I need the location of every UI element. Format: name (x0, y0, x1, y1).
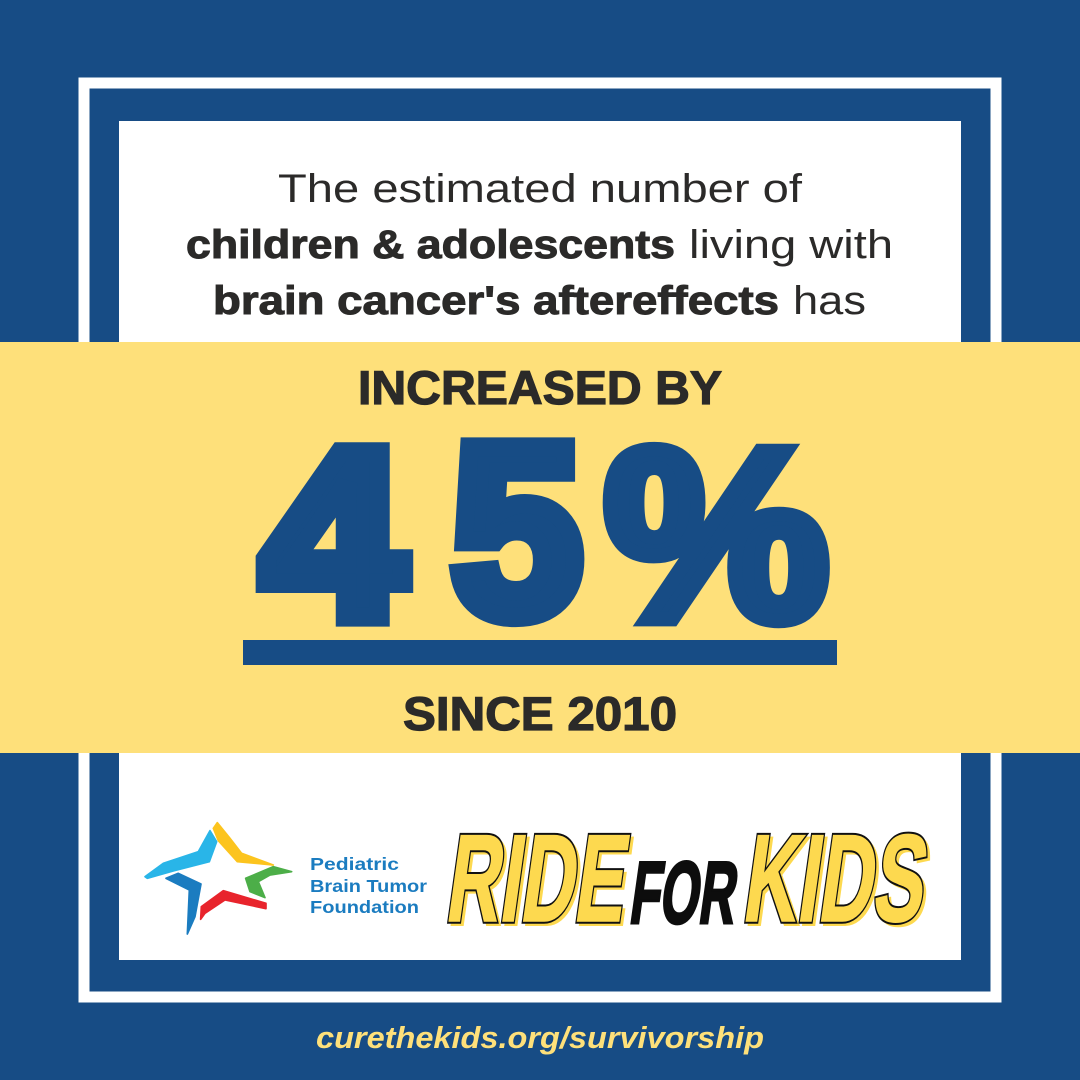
big number: 45%: % (604, 398, 829, 671)
logo: ride for kids: FOR (625, 843, 744, 942)
big number: 45%: 4 (262, 399, 404, 668)
underline (243, 640, 837, 665)
logo: foundation name: Brain Tumor (310, 876, 427, 896)
logo: ride for kids: KIDS (737, 810, 937, 948)
logo: ride for kids: RIDE (443, 813, 641, 951)
white frame (84, 83, 996, 997)
white inner panel (119, 121, 961, 960)
big number: 45%: 5 (452, 394, 582, 667)
logo: ride for kids (440, 810, 940, 951)
heading: increased by: INCREASED BY (358, 361, 722, 414)
url: curethekids.org/survivorship (316, 1020, 764, 1055)
since 2010: SINCE 2010 (403, 687, 677, 740)
yellow band (0, 342, 1080, 753)
big number: 45% (262, 394, 829, 671)
logo: ride for kids: RIDE (440, 810, 638, 948)
intro text: has (793, 279, 866, 323)
logo: foundation name: Pediatric (310, 854, 399, 874)
logo: ride for kids: KIDS (737, 810, 937, 948)
logo: star (145, 823, 292, 934)
logo: ride for kids: KIDS (740, 813, 940, 951)
intro text: The estimated number of (278, 167, 803, 211)
logo: foundation name (310, 854, 427, 917)
logo: ride for kids: RIDE (440, 810, 638, 948)
intro text: children & adolescents (186, 223, 675, 267)
logo: foundation name: Foundation (310, 897, 419, 917)
intro text: living with (689, 223, 893, 267)
intro text: brain cancer's aftereffects (213, 279, 779, 323)
intro text (186, 167, 893, 323)
